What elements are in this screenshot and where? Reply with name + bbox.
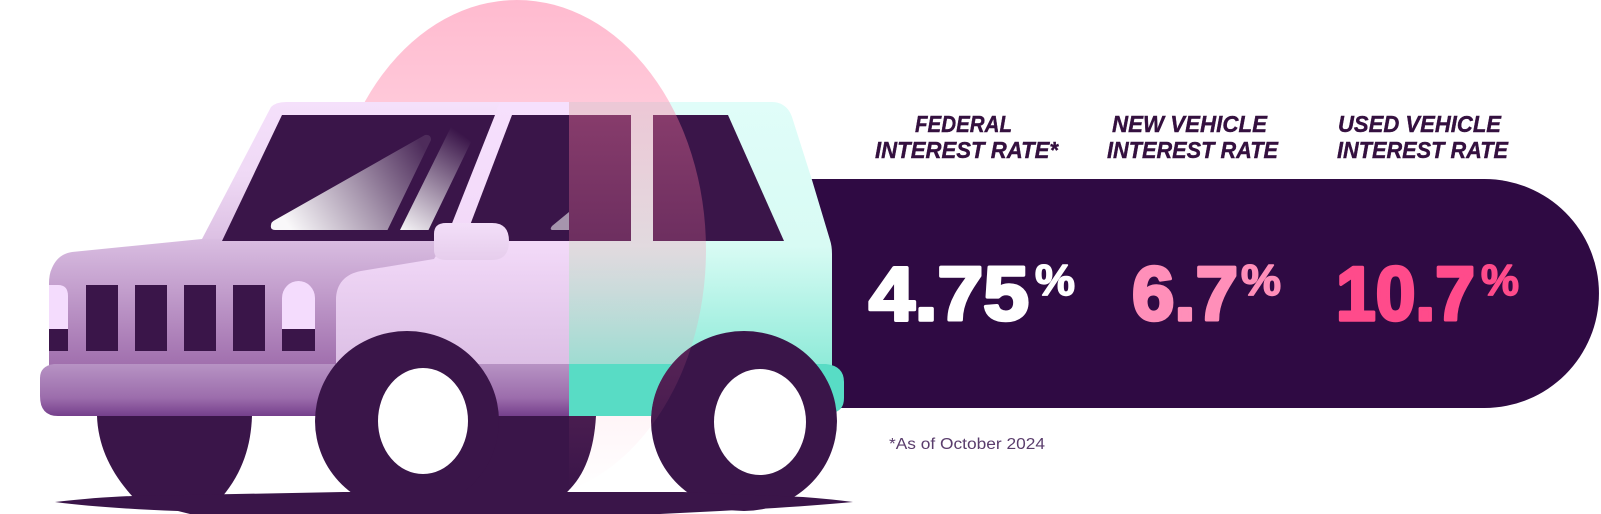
ground shadow (55, 492, 853, 514)
label: used vehicle interest rate: USED VEHICLE (1338, 111, 1502, 137)
label: federal interest rate (875, 111, 1060, 163)
cabin (202, 102, 500, 239)
grille bars (86, 285, 265, 351)
front window (222, 115, 495, 241)
label: new vehicle interest rate (1107, 111, 1279, 163)
mint bumper segment (569, 364, 672, 416)
vehicle, lilac front half (40, 102, 569, 496)
value: federal rate: % (1035, 256, 1075, 305)
label: federal interest rate: FEDERAL (915, 111, 1012, 137)
windshield glare strip (400, 125, 471, 230)
label: new vehicle interest rate: NEW VEHICLE (1112, 111, 1268, 137)
value: used vehicle rate: % (1481, 256, 1519, 305)
inner wheel (97, 416, 252, 497)
underbody shadow (495, 416, 569, 492)
side window glare (551, 212, 569, 230)
side mirror (434, 223, 509, 260)
value: used vehicle rate: 10.7 (1336, 252, 1475, 337)
right headlight (282, 281, 315, 351)
hood (49, 239, 440, 370)
vehicle, mint rear half (400, 102, 844, 511)
label: used vehicle interest rate: INTEREST RATE (1337, 137, 1509, 163)
value: new vehicle rate: 6.7 (1132, 252, 1238, 337)
data pill background (760, 179, 1599, 408)
value: new vehicle rate: % (1241, 256, 1281, 305)
value: federal rate: 4.75 (869, 252, 1029, 337)
door panel (336, 256, 440, 364)
label: new vehicle interest rate: INTEREST RATE (1107, 137, 1279, 163)
footnote: *As of October 2024 (889, 436, 1045, 453)
side window (470, 115, 569, 241)
label: used vehicle interest rate (1337, 111, 1509, 163)
label: federal interest rate: INTEREST RATE* (875, 137, 1060, 163)
left headlight (49, 285, 68, 351)
bumper (40, 364, 569, 416)
pink circle backdrop (328, 0, 706, 500)
front wheel (315, 331, 499, 492)
windshield glare (271, 135, 431, 230)
